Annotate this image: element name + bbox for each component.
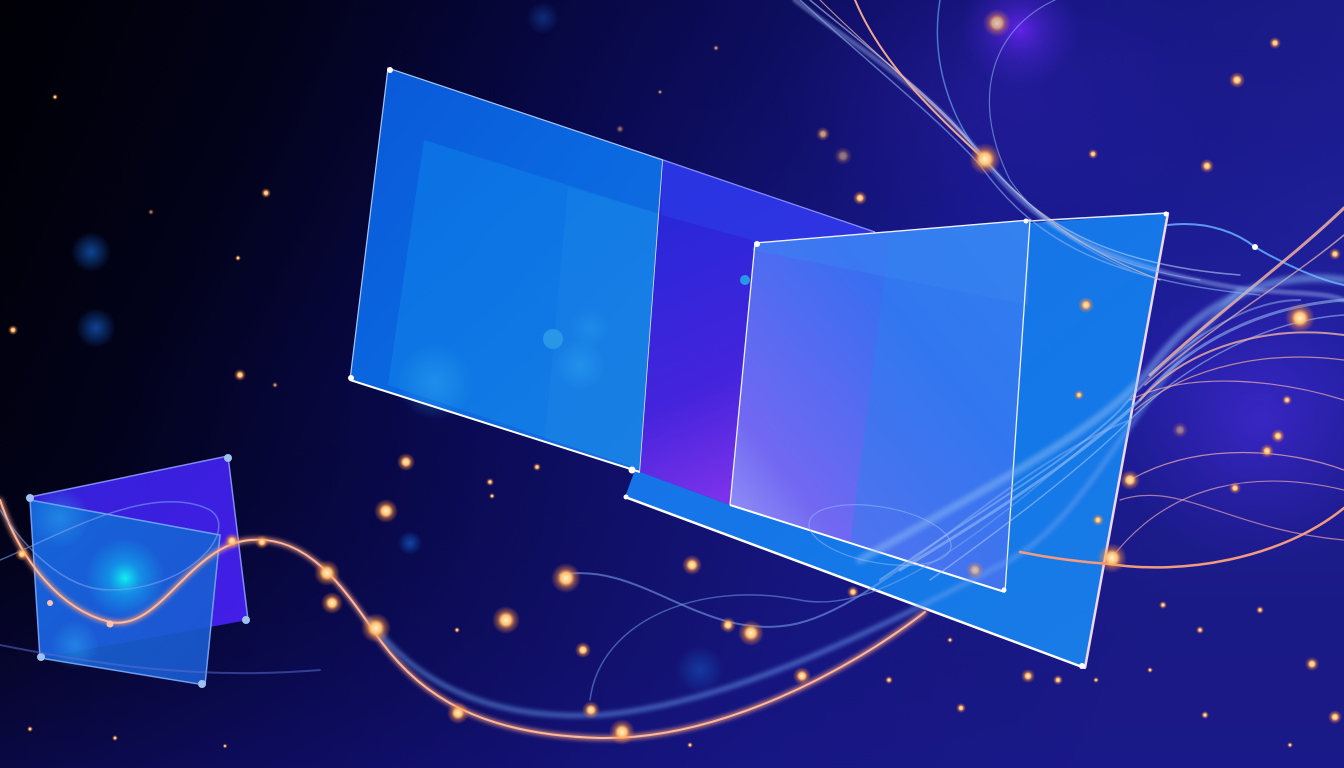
panel: purple middle pane <box>640 160 875 505</box>
panel: small back pane <box>30 456 248 658</box>
light stream: upper right strands <box>795 0 1344 300</box>
panel: left large glass pane <box>350 68 663 472</box>
sparkle corners <box>47 67 1258 669</box>
light stream: lower orange ribbon <box>0 290 1240 738</box>
light stream: right side strands <box>804 208 1344 580</box>
panel: front glass pane <box>730 220 1030 592</box>
panel: right large glass pane <box>625 213 1168 668</box>
panel: small front pane <box>26 454 250 688</box>
